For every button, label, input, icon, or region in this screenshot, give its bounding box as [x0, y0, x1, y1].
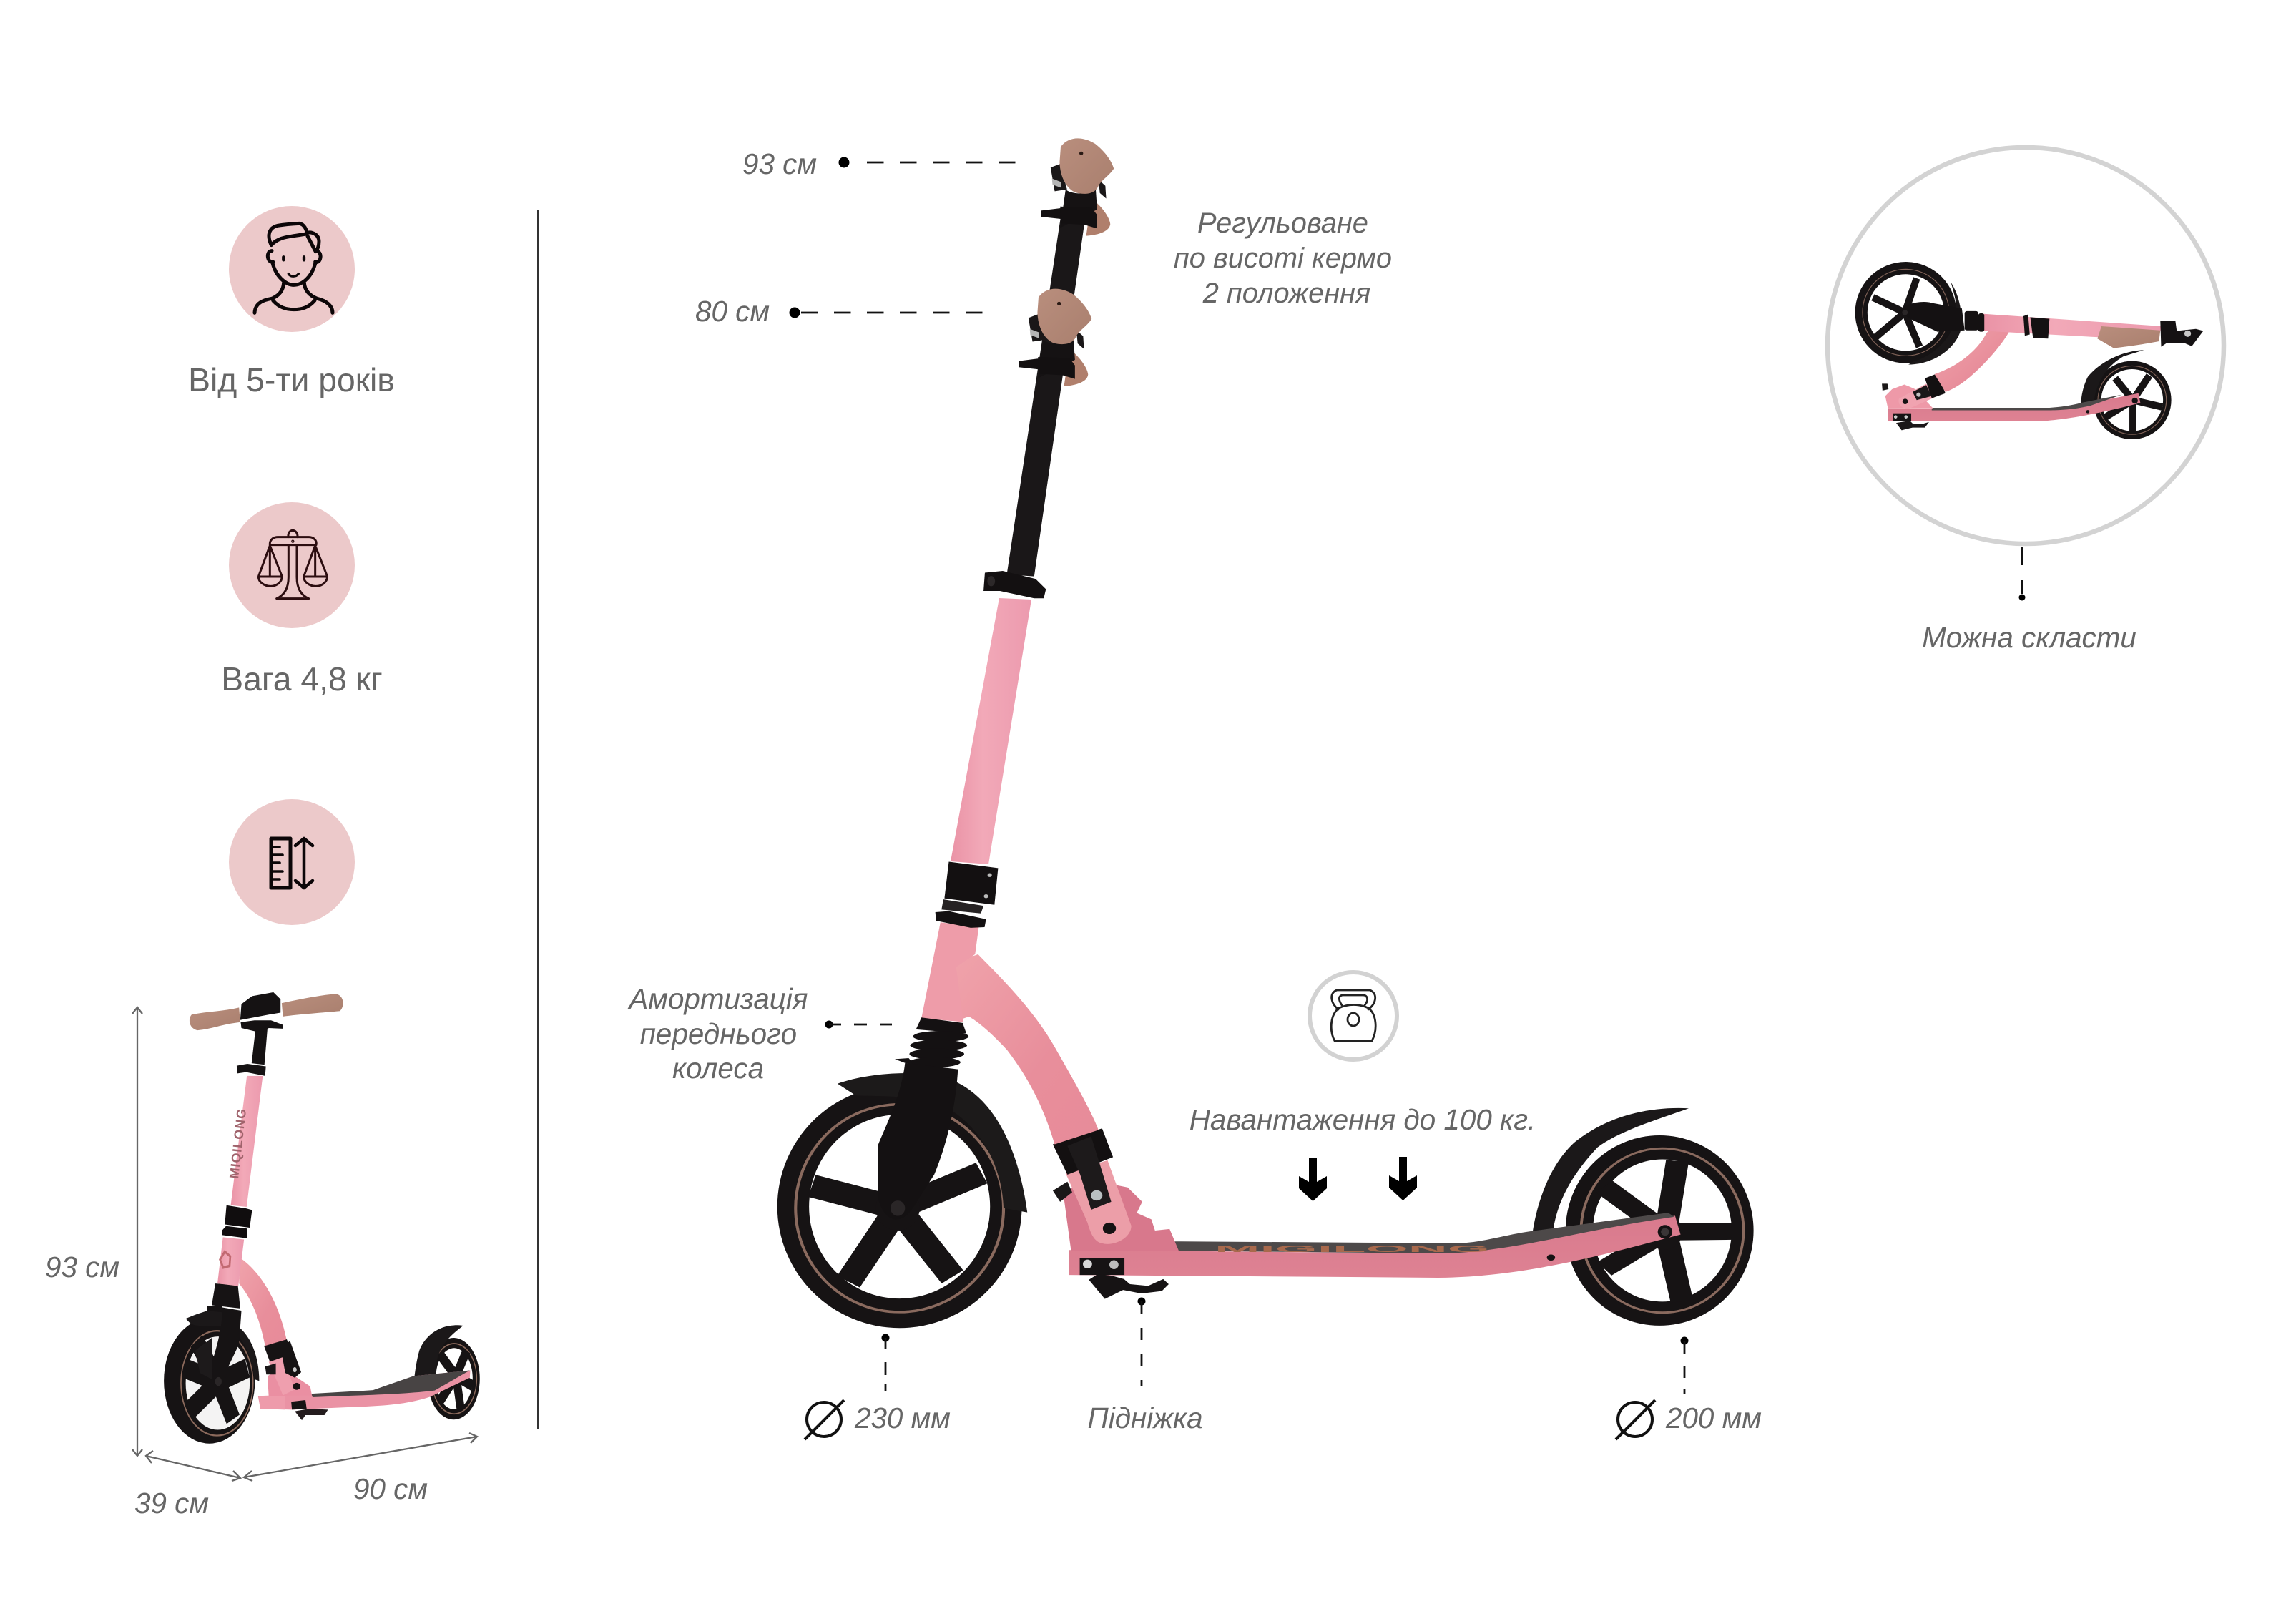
main scooter side view [777, 138, 1754, 1328]
main scooter: front folding joint [1053, 1128, 1179, 1251]
main scooter: handlebar at 80 cm [1019, 289, 1091, 386]
text: can be folded: Можна скласти [1922, 621, 2136, 654]
icon: load arrow left [1299, 1158, 1327, 1201]
main scooter: kickstand [1080, 1258, 1169, 1299]
callout: kickstand [1087, 1298, 1203, 1434]
icon: weight scales [229, 502, 355, 628]
callout: front wheel 230 mm: 230 мм [854, 1402, 951, 1434]
callout: folded dashes [2018, 547, 2026, 601]
icon: child age [229, 206, 355, 332]
main scooter: black telescopic tube [983, 217, 1085, 598]
text: load: Навантаження до 100 кг. [1189, 1103, 1536, 1136]
folded: fork and spring [1899, 302, 2049, 338]
dimension arrows [132, 1007, 477, 1481]
main scooter: stem collar [936, 861, 998, 928]
callout: front suspension: Амортизація [627, 982, 808, 1015]
icon: kettlebell [1310, 972, 1397, 1060]
label: length 90 cm: 90 см [353, 1472, 428, 1505]
panel: folded scooter [1828, 147, 2224, 654]
small scooter overview with dimensions [45, 992, 480, 1520]
deck brand text: MIGILONG [1215, 1243, 1490, 1254]
main scooter: curved frame [951, 954, 1099, 1145]
label: weight: Вага 4,8 кг [221, 660, 383, 698]
small scooter: deck [258, 1371, 471, 1409]
main scooter: deck and grip tape [1069, 1213, 1681, 1278]
folded: curved frame [1935, 326, 2011, 392]
callout: front suspension [627, 982, 892, 1085]
callout: front suspension: переднього [640, 1017, 797, 1050]
folded: rear wheel [2081, 350, 2172, 439]
folded: hand grip [2097, 326, 2160, 348]
icon: dimensions ruler [229, 799, 355, 925]
callout: front suspension: колеса [672, 1052, 764, 1085]
icon: diameter [805, 1400, 844, 1439]
small scooter: front wheel [164, 1306, 259, 1444]
small scooter: brand text: MIQILONG [227, 1107, 249, 1179]
callout: rear wheel 200 mm: 200 мм [1665, 1402, 1762, 1434]
callout: 93 cm height [742, 147, 1016, 180]
main scooter: rear wheel [1533, 1108, 1754, 1326]
folded: stem tube [1983, 314, 2162, 337]
text: adjustable handlebar: по висоті кермо [1174, 243, 1392, 274]
small scooter: steering tube [217, 1028, 268, 1286]
small scooter: handlebar [190, 992, 343, 1031]
text: adjustable handlebar: 2 положення [1202, 278, 1370, 309]
label: depth 39 cm: 39 см [134, 1487, 209, 1520]
main scooter: pink stem [951, 598, 1031, 864]
main scooter: handlebar at 93 cm [1041, 138, 1114, 236]
main scooter: head tube [921, 922, 978, 1022]
callout: 93 cm height: 93 см [742, 147, 817, 180]
folded: hinge [1882, 373, 1946, 409]
main scooter: fork and spring [878, 1017, 968, 1220]
small scooter: fork and spring [207, 1283, 242, 1387]
callout: 80 cm height [695, 295, 983, 328]
icon: load arrow right [1389, 1157, 1417, 1200]
callout: rear wheel 200 mm [1616, 1336, 1762, 1439]
label: height 93 cm: 93 см [45, 1251, 119, 1283]
small scooter: rear wheel [413, 1325, 480, 1419]
main scooter: front fender [838, 1073, 1027, 1213]
folded: front wheel [1855, 262, 1962, 365]
callout: kickstand: Підніжка [1087, 1402, 1203, 1434]
divider line [537, 210, 539, 1429]
icon: diameter [1616, 1400, 1655, 1439]
label: age: Від 5-ти років [188, 361, 395, 398]
main scooter: front wheel [777, 1085, 1022, 1328]
main scooter: rear fender [1533, 1108, 1689, 1233]
callout: front wheel 230 mm [805, 1334, 951, 1439]
callout: 80 cm height: 80 см [695, 295, 770, 328]
small scooter: folding joint [264, 1339, 328, 1420]
small scooter: curved frame [239, 1258, 287, 1346]
text: adjustable handlebar: Регульоване [1197, 207, 1368, 239]
panel: specs column [188, 206, 539, 1429]
folded: deck [1888, 393, 2140, 430]
callout: load up to 100 kg [1189, 972, 1536, 1201]
folded: handlebar clamp [2160, 321, 2203, 347]
